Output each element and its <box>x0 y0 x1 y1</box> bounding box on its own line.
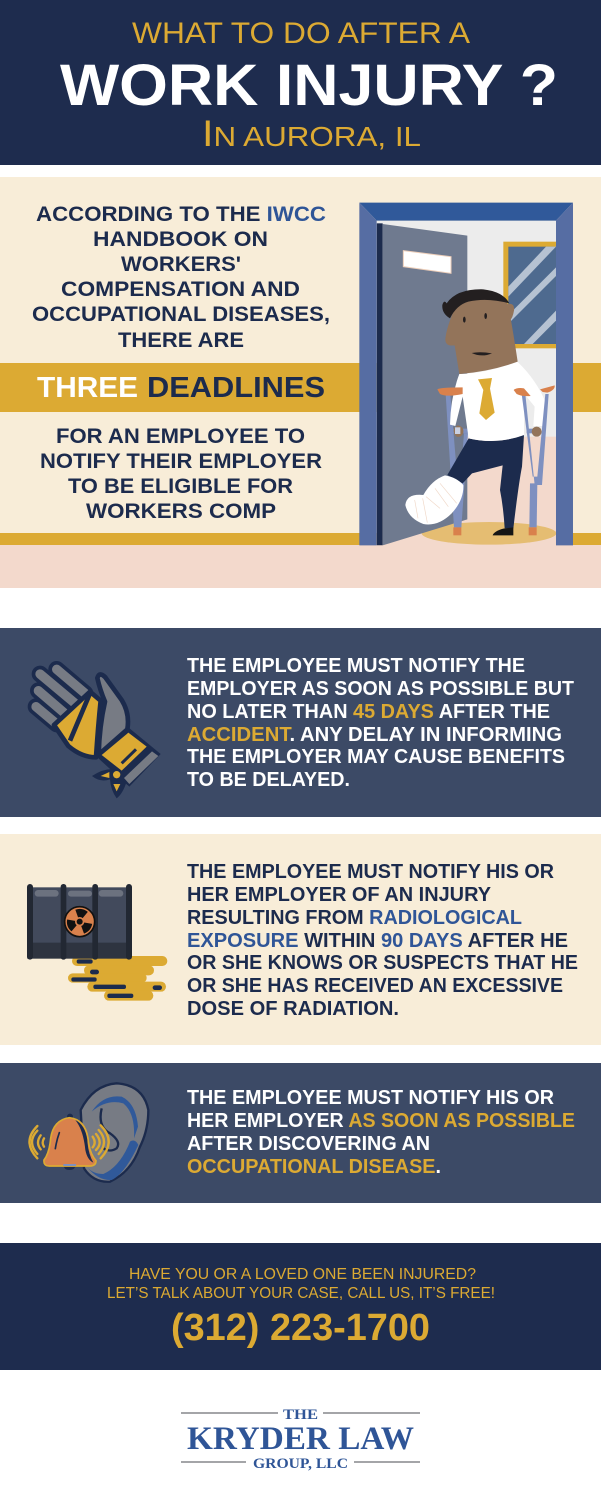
text: occupational disease deadline: OCCUPATIONAL DISEASE. <box>187 1156 441 1178</box>
phone number: (312) 223-1700 <box>171 1307 430 1349</box>
text: occupational disease deadline: AFTER DISCOVERING AN <box>187 1133 430 1155</box>
text: call invitation: HAVE YOU OR A LOVED ONE BEEN INJURED? <box>129 1266 476 1283</box>
text: 90 days deadline: OR SHE HAS RECEIVED AN EXCESSIVE <box>187 975 563 997</box>
intro text: handbook: COMPENSATION AND <box>61 277 300 301</box>
intro text: notify employer: TO BE ELIGIBLE FOR <box>68 474 293 498</box>
text: 45 days deadline: EMPLOYER AS SOON AS POSSIBLE BUT <box>187 678 574 700</box>
text: call invitation <box>107 1266 495 1302</box>
heading: three deadlines: DEADLINES <box>147 372 325 404</box>
intro text: handbook <box>32 202 330 352</box>
panel: call to action <box>0 1243 601 1370</box>
intro text: notify employer: WORKERS COMP <box>86 499 276 523</box>
text: 90 days deadline <box>187 861 578 1020</box>
title line: in aurora, il: IN AURORA, IL <box>202 113 421 154</box>
header banner <box>0 0 601 165</box>
intro text: handbook: HANDBOOK ON <box>93 227 268 251</box>
man figure <box>405 289 555 535</box>
logo: the kryder law group <box>181 1407 420 1472</box>
text: 90 days deadline: THE EMPLOYEE MUST NOTIFY HIS OR <box>187 861 555 883</box>
heading: three deadlines: THREE <box>37 372 138 404</box>
text: 90 days deadline: DOSE OF RADIATION. <box>187 998 399 1020</box>
icon: injured gloved hand <box>36 669 161 798</box>
text: 90 days deadline: HER EMPLOYER OF AN INJURY <box>187 884 492 906</box>
intro text: notify employer <box>40 424 322 523</box>
text: call invitation: LET’S TALK ABOUT YOUR CASE, CALL US, IT’S FREE! <box>107 1285 495 1302</box>
panel: intro <box>0 177 601 588</box>
text: 45 days deadline: THE EMPLOYER MAY CAUSE BENEFITS <box>187 746 565 768</box>
text: 90 days deadline: OR SHE KNOWS OR SUSPECTS THAT HE <box>187 952 578 974</box>
intro text: handbook: WORKERS' <box>121 252 241 276</box>
panel: 90 days radiological notice <box>0 834 601 1045</box>
text: 90 days deadline: EXPOSURE WITHIN 90 DAYS AFTER HE <box>187 930 568 952</box>
icon: ear with ringing bell <box>29 1083 148 1182</box>
text: 45 days deadline: TO BE DELAYED. <box>187 769 350 791</box>
text: 45 days deadline: NO LATER THAN 45 DAYS AFTER THE <box>187 701 550 723</box>
text: occupational disease deadline <box>187 1087 575 1178</box>
icon: radiation symbol <box>65 907 95 937</box>
logo: the kryder law group: THE <box>283 1407 318 1423</box>
text: 90 days deadline: RESULTING FROM RADIOLOGICAL <box>187 907 522 929</box>
text: occupational disease deadline: THE EMPLOYEE MUST NOTIFY HIS OR <box>187 1087 555 1109</box>
intro text: notify employer: FOR AN EMPLOYEE TO <box>56 424 305 448</box>
title: work injury: WORK INJURY ? <box>60 53 558 118</box>
panel: 45 days notice <box>0 628 601 817</box>
logo: the kryder law group: KRYDER LAW <box>187 1421 414 1457</box>
text: 45 days deadline: ACCIDENT. ANY DELAY IN INFORMING <box>187 724 562 746</box>
text: occupational disease deadline: HER EMPLOYER AS SOON AS POSSIBLE <box>187 1110 575 1132</box>
panel: occupational disease notice <box>0 1063 601 1203</box>
heading: three deadlines <box>37 372 325 404</box>
icon: leaking radioactive barrel <box>27 884 167 1001</box>
illustration: injured man on crutches in doorway <box>359 203 573 545</box>
text: 45 days deadline: THE EMPLOYEE MUST NOTIFY THE <box>187 655 525 677</box>
intro text: handbook: OCCUPATIONAL DISEASES, <box>32 302 330 326</box>
title line: what to do after a: WHAT TO DO AFTER A <box>132 17 470 50</box>
intro text: handbook: THERE ARE <box>118 328 244 352</box>
door frame <box>359 203 573 545</box>
text: 45 days deadline <box>187 655 574 791</box>
intro text: handbook: ACCORDING TO THE IWCC <box>36 202 326 226</box>
logo: the kryder law group: GROUP, LLC <box>253 1456 348 1472</box>
intro text: notify employer: NOTIFY THEIR EMPLOYER <box>40 449 322 473</box>
